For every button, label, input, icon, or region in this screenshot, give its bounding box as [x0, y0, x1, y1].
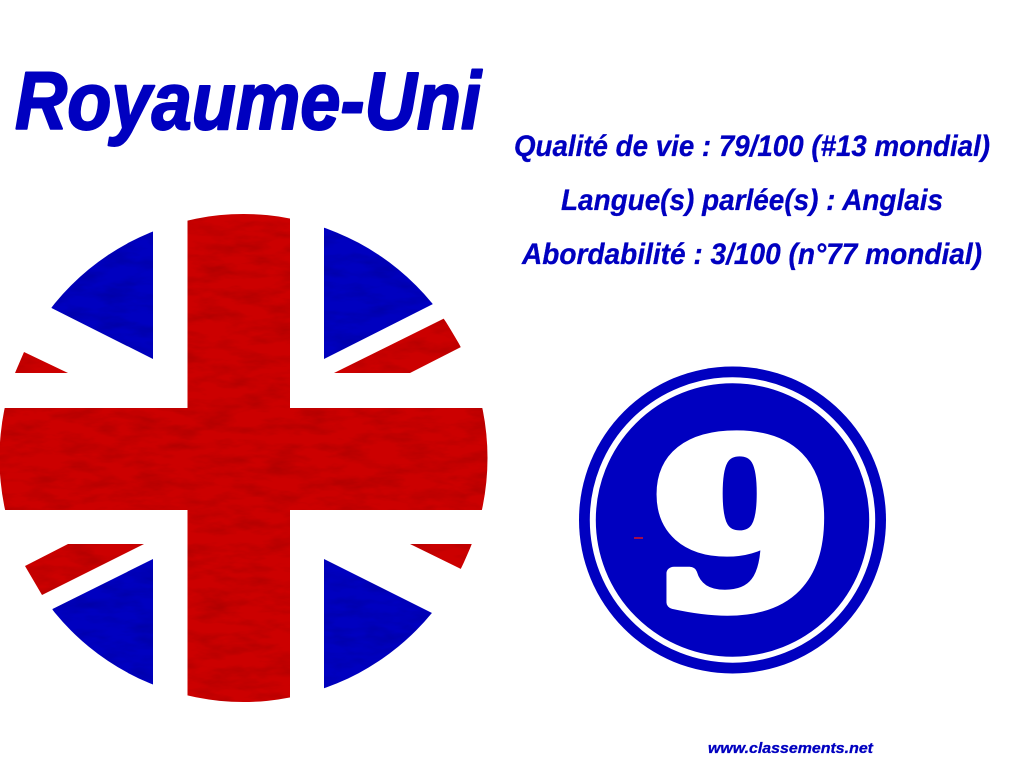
red diagonals: [15, 318, 472, 595]
icon: round Union Jack flag: [0, 200, 495, 720]
blue triangles: [52, 228, 433, 688]
tiny red mark: [634, 537, 643, 539]
red cross: [0, 200, 495, 710]
title: Royaume-Uni: [15, 56, 483, 147]
footer website: www.classements.net: [708, 741, 874, 757]
badge disc: [579, 366, 886, 674]
affordability line: Abordabilité : 3/100 (n°77 mondial): [521, 238, 982, 271]
languages line: Langue(s) parlée(s) : Anglais: [561, 184, 943, 217]
info block: key facts: [514, 130, 990, 271]
white inner ring: [593, 380, 872, 660]
quality of life line: Qualité de vie : 79/100 (#13 mondial): [514, 130, 990, 163]
rank number: 9: [650, 393, 833, 661]
icon: rank badge 9: [579, 366, 886, 674]
